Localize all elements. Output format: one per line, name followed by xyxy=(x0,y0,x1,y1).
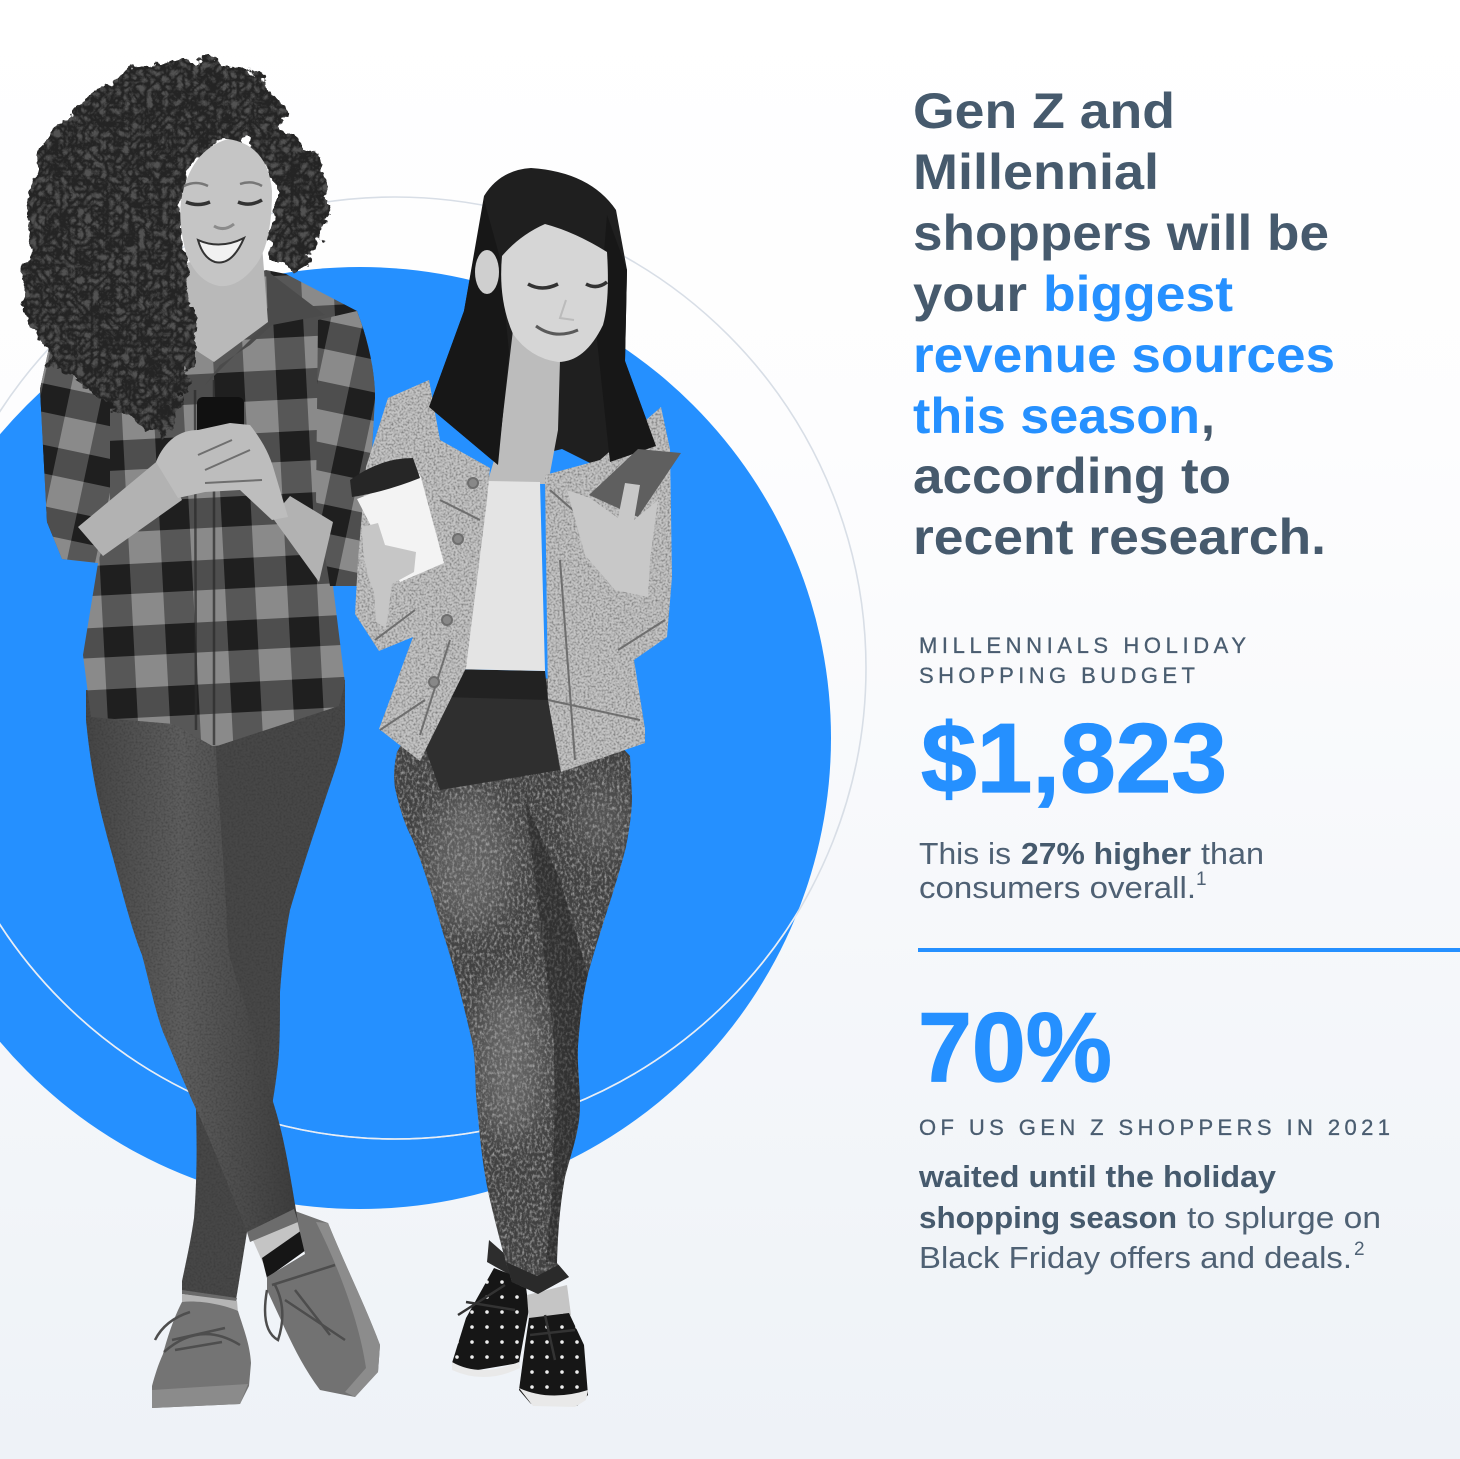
stat label: SHOPPING BUDGET xyxy=(919,663,1195,688)
right shoe and ankle xyxy=(251,1211,380,1397)
stat description: 27% higher xyxy=(1021,836,1191,871)
headline: revenue sources xyxy=(913,327,1335,383)
headline: recent research. xyxy=(913,509,1326,565)
stat description: This is xyxy=(919,836,1011,871)
white tank top xyxy=(449,481,545,671)
back leg and left shoe xyxy=(152,680,345,1408)
plaid shirt xyxy=(40,270,375,747)
headline xyxy=(913,83,1335,565)
hands xyxy=(156,423,288,520)
headline: this season xyxy=(913,388,1200,444)
stat description: Black Friday offers and deals. xyxy=(919,1240,1352,1275)
face xyxy=(475,224,608,362)
stat description: to splurge on xyxy=(1187,1200,1381,1235)
stat value: $1,823 xyxy=(921,703,1227,813)
neck and chest xyxy=(178,245,268,362)
phone xyxy=(589,449,681,517)
hair front strands xyxy=(429,200,656,465)
headline: Millennial xyxy=(913,144,1159,200)
hair back xyxy=(429,168,656,468)
stat label: MILLENNIALS HOLIDAY xyxy=(919,633,1246,658)
stat label xyxy=(919,633,1246,688)
jacket seams and buttons xyxy=(375,478,665,760)
stat value: 70% xyxy=(918,992,1112,1102)
headline: , xyxy=(1201,388,1215,444)
coffee cup xyxy=(350,458,444,582)
stat description: waited until the holiday xyxy=(918,1159,1277,1194)
headline: shoppers will be xyxy=(913,205,1329,261)
right shoe xyxy=(519,1285,588,1407)
headline: your xyxy=(913,266,1027,322)
stat: millennials budget xyxy=(919,633,1264,905)
headline: Gen Z and xyxy=(913,83,1175,139)
denim jacket xyxy=(355,380,672,772)
thin outline circle xyxy=(0,197,866,1139)
back cuff and left shoe xyxy=(452,1240,529,1377)
stat description: than xyxy=(1201,836,1264,871)
stat description: shopping season xyxy=(919,1200,1177,1235)
cuff of front leg xyxy=(247,1209,298,1242)
forearms xyxy=(78,458,333,582)
stat description: consumers overall. xyxy=(919,870,1196,905)
neck and chest xyxy=(487,330,560,484)
stat description: 2 xyxy=(1354,1239,1365,1260)
stat description: 1 xyxy=(1196,869,1207,890)
headline: according to xyxy=(913,448,1231,504)
blue circle backdrop xyxy=(0,267,831,1209)
hand on cup xyxy=(362,523,416,628)
hand holding phone xyxy=(567,483,658,597)
curly hair xyxy=(22,58,330,438)
face xyxy=(180,139,272,286)
stat description xyxy=(919,836,1264,905)
front leg xyxy=(86,690,298,1232)
figure: woman in denim jacket xyxy=(350,168,681,1407)
acid wash jeans xyxy=(394,668,632,1294)
headline: biggest xyxy=(1043,266,1233,322)
phone xyxy=(197,397,244,453)
jeans waistband xyxy=(442,669,548,700)
stat: gen z shoppers xyxy=(918,992,1390,1275)
figure: woman in plaid shirt xyxy=(22,58,380,1408)
stat description xyxy=(918,1159,1381,1275)
stat label: OF US GEN Z SHOPPERS IN 2021 xyxy=(919,1115,1390,1140)
